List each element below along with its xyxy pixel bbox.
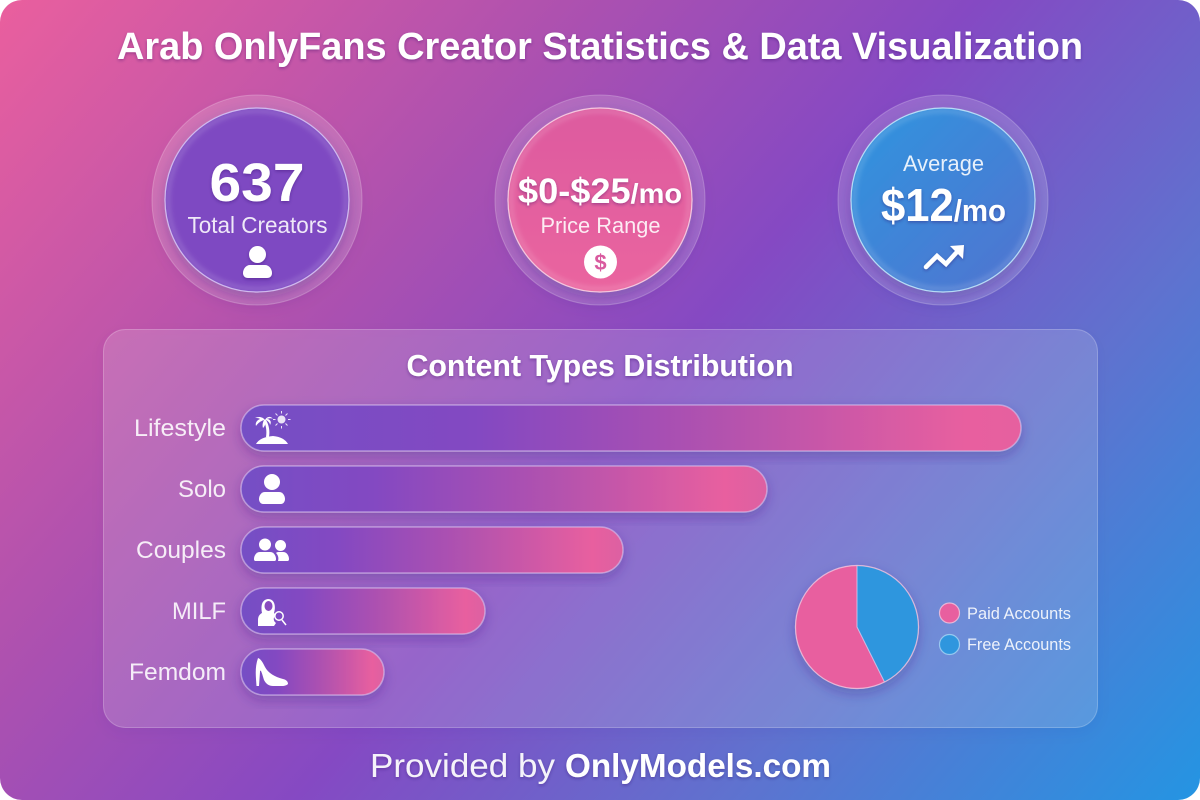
icon: person [243,246,272,278]
icon: woman with magnifier [258,599,286,626]
icon: palm island [255,411,290,444]
bar: lifestyle [134,405,1021,451]
icon: person [259,474,285,504]
stat circle: average [838,95,1048,305]
icon: high heel [256,658,288,686]
stat circle: total creators [152,95,362,305]
icon: two people [254,538,289,561]
pie chart [796,566,918,688]
icon: trend arrow [926,245,964,267]
footer credit [370,747,831,784]
icon: dollar coin: $ [594,250,607,275]
panel: content types [104,330,1098,728]
bar: couples: Couples [136,537,226,564]
bar: femdom: Femdom [129,659,226,686]
value: price range: $0-$25/mo [518,172,682,211]
value: 637: 637 [210,153,304,213]
label: average: Average [903,151,984,176]
legend: free accounts: Free Accounts [967,636,1071,654]
panel heading: Content Types Distribution [406,348,794,383]
bar: milf [172,588,485,634]
icon: dollar coin [584,246,617,278]
bar: solo: Solo [178,476,226,503]
legend: paid accounts: Paid Accounts [967,605,1071,623]
bar: solo [178,466,767,512]
label: total creators: Total Creators [188,212,328,238]
stat circle: price range [495,95,705,305]
footer credit: Provided by [370,747,556,784]
label: price range: Price Range [540,213,660,238]
title: Arab OnlyFans Creator Statistics & Data Visualization [117,26,1083,68]
bar: couples [136,527,623,573]
value: average: $12/mo [881,179,1006,231]
bar: femdom [129,649,384,695]
footer credit: OnlyModels.com [565,747,831,784]
bar: lifestyle: Lifestyle [134,415,226,442]
bar: milf: MILF [172,598,226,625]
